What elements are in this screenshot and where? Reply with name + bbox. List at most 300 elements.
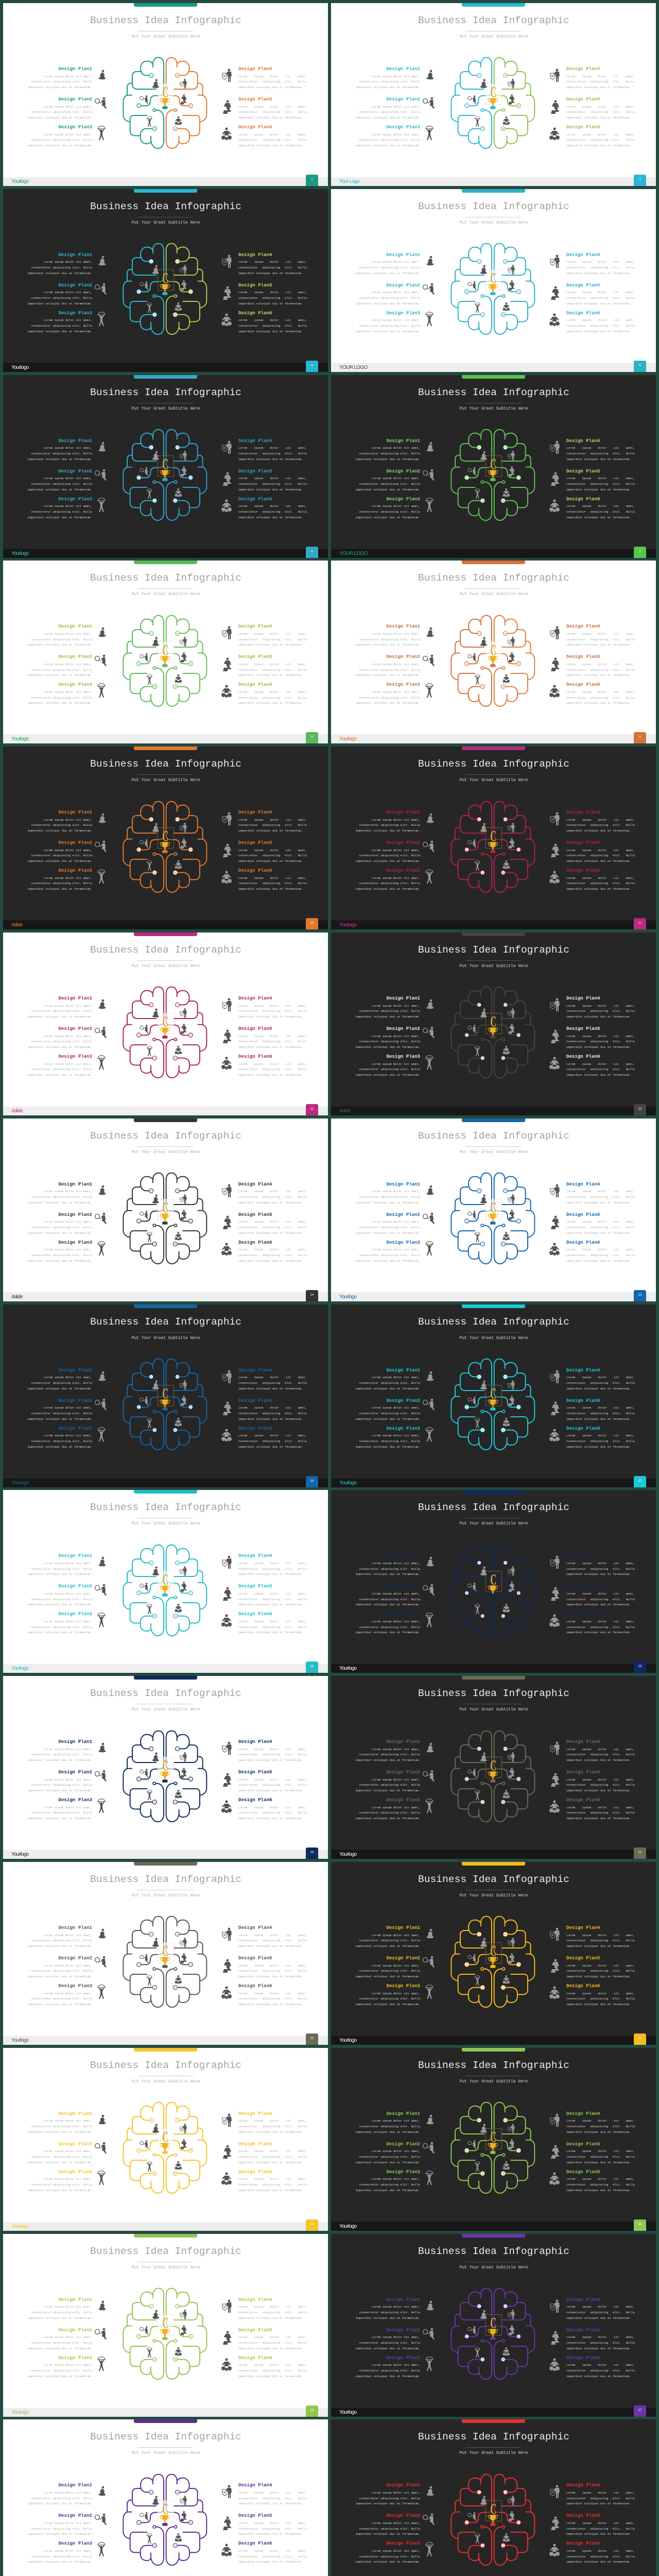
plan 3 icon bbox=[97, 2541, 106, 2557]
plan 6 text: Lorem ipsum dolor sit amet, consectetur adipiscing elit. Nulla imperdiet volutpat dui et fermentum. bbox=[566, 1062, 635, 1077]
brain diagram bbox=[123, 57, 207, 149]
footer with logo and page number bbox=[3, 361, 328, 372]
plan 6 text bbox=[566, 310, 635, 336]
plan 5 text: Lorem ipsum dolor sit amet, consectetur adipiscing elit. Nulla imperdiet volutpat dui et fermentum. bbox=[238, 1406, 307, 1421]
plan 1 icon bbox=[98, 627, 106, 637]
plan 1 text bbox=[24, 2297, 92, 2323]
plan 1 text bbox=[352, 623, 420, 649]
plan 6 icon bbox=[549, 685, 560, 698]
plan 3 icon bbox=[425, 1984, 433, 1999]
plan 3 text bbox=[28, 310, 92, 333]
plan 3 text: Design Plan3 bbox=[59, 1983, 92, 1989]
plan 2 icon bbox=[422, 97, 435, 109]
plan 4 icon bbox=[550, 69, 560, 82]
plan 5 text bbox=[238, 1583, 307, 1609]
plan 6 text bbox=[238, 1240, 307, 1265]
footer with logo and page number bbox=[331, 175, 656, 186]
plan 2 text bbox=[24, 2513, 92, 2538]
plan 4 text: Design Plan4 bbox=[238, 66, 272, 72]
plan 3 text: Design Plan3 bbox=[59, 1426, 92, 1431]
footer with logo and page number: 19 bbox=[638, 1665, 642, 1668]
plan 4 text: Lorem ipsum dolor sit amet, consectetur adipiscing elit. Nulla imperdiet volutpat dui et fermentum. bbox=[238, 2491, 307, 2505]
plan 2 text bbox=[24, 1026, 92, 1052]
plan 3 text bbox=[24, 2169, 92, 2195]
plan 5 text bbox=[238, 1212, 307, 1238]
plan 1 icon bbox=[98, 1928, 106, 1939]
plan 3 text: Design Plan3 bbox=[386, 2355, 420, 2361]
plan 4 icon bbox=[222, 1370, 232, 1383]
plan 6 text bbox=[566, 1983, 635, 2009]
plan 4 text: Design Plan4 bbox=[238, 2111, 272, 2116]
subtitle: Put Your Great Subtitle Here bbox=[460, 964, 528, 969]
plan 5 text bbox=[566, 2513, 635, 2538]
footer with logo and page number: 4slide bbox=[11, 1108, 23, 1114]
plan 5 text bbox=[238, 1769, 307, 1795]
top tab bbox=[462, 3, 525, 7]
title: Business Idea Infographic bbox=[418, 387, 569, 398]
plan 4 text bbox=[566, 1925, 635, 1951]
footer with logo and page number: 25 bbox=[638, 2223, 642, 2226]
plan 1 icon bbox=[98, 1371, 106, 1381]
plan 1 text: Design Plan1 bbox=[386, 66, 420, 72]
plan 1 text: Lorem ipsum dolor sit amet, consectetur adipiscing elit. Nulla imperdiet volutpat dui et fermentum. bbox=[28, 446, 92, 461]
plan 4 icon bbox=[550, 2299, 560, 2313]
plan 4 text: Lorem ipsum dolor sit amet, consectetur adipiscing elit. Nulla imperdiet volutpat dui et fermentum. bbox=[566, 2119, 635, 2134]
title: Business Idea Infographic bbox=[90, 1502, 241, 1513]
plan 5 icon bbox=[223, 100, 231, 114]
plan 1 icon bbox=[98, 999, 106, 1009]
plan 2 icon bbox=[422, 1212, 435, 1224]
plan 2 text: Lorem ipsum dolor sit amet, consectetur adipiscing elit. Nulla imperdiet volutpat dui et fermentum. bbox=[356, 1406, 420, 1421]
plan 5 icon bbox=[551, 1401, 560, 1415]
plan 5 text bbox=[566, 654, 635, 680]
title: Business Idea Infographic bbox=[90, 1688, 241, 1699]
brain diagram bbox=[450, 614, 535, 708]
plan 5 text bbox=[566, 1398, 635, 1423]
plan 6 icon bbox=[221, 313, 232, 326]
plan 2 text: Design Plan2 bbox=[59, 1212, 92, 1217]
plan 1 text: Design Plan1 bbox=[386, 2111, 420, 2116]
plan 3 text bbox=[24, 1426, 92, 1451]
plan 4 icon bbox=[222, 255, 232, 268]
plan 2 text: Design Plan2 bbox=[59, 1583, 92, 1589]
plan 6 text bbox=[238, 1797, 307, 1823]
plan 4 text: Lorem ipsum dolor sit amet, consectetur adipiscing elit. Nulla imperdiet volutpat dui et fermentum. bbox=[238, 632, 307, 647]
plan 6 text bbox=[566, 496, 635, 522]
plan 4 icon bbox=[222, 998, 232, 1011]
plan 4 text: Design Plan4 bbox=[566, 1925, 600, 1930]
plan 6 icon bbox=[549, 313, 560, 326]
plan 4 icon bbox=[550, 812, 560, 825]
footer with logo and page number: 3 bbox=[639, 178, 641, 181]
plan 2 icon bbox=[94, 1956, 107, 1968]
plan 5 text: Lorem ipsum dolor sit amet, consectetur adipiscing elit. Nulla imperdiet volutpat dui et fermentum. bbox=[566, 105, 635, 120]
plan 6 text: Lorem ipsum dolor sit amet, consectetur adipiscing elit. Nulla imperdiet volutpat dui et fermentum. bbox=[566, 1806, 635, 1820]
plan 6 text: Lorem ipsum dolor sit amet, consectetur adipiscing elit. Nulla imperdiet volutpat dui et fermentum. bbox=[566, 2549, 635, 2564]
plan 4 text: Lorem ipsum dolor sit amet, consectetur adipiscing elit. Nulla imperdiet volutpat dui et fermentum. bbox=[238, 1748, 307, 1762]
plan 2 text: Lorem ipsum dolor sit amet, consectetur adipiscing elit. Nulla imperdiet volutpat dui et fermentum. bbox=[28, 1592, 92, 1606]
plan 3 icon bbox=[425, 1054, 433, 1070]
plan 6 text: Design Plan6 bbox=[566, 2540, 600, 2546]
title: Business Idea Infographic bbox=[90, 2246, 241, 2257]
plan 1 text bbox=[24, 1367, 92, 1393]
footer with logo and page number: 4slide bbox=[11, 922, 23, 928]
plan 3 text: Lorem ipsum dolor sit amet, consectetur adipiscing elit. Nulla imperdiet volutpat dui et fermentum. bbox=[356, 1434, 420, 1449]
plan 5 text: Design Plan5 bbox=[238, 2327, 272, 2333]
footer with logo and page number bbox=[3, 1476, 328, 1487]
plan 5 icon bbox=[223, 2516, 232, 2530]
plan 5 text bbox=[566, 840, 635, 866]
plan 4 text: Design Plan4 bbox=[238, 1739, 272, 1744]
plan 2 text bbox=[352, 1769, 420, 1795]
plan 4 text bbox=[238, 252, 307, 275]
plan 1 text: Lorem ipsum dolor sit amet, consectetur adipiscing elit. Nulla imperdiet volutpat dui et fermentum. bbox=[356, 1004, 420, 1019]
plan 4 text: Design Plan4 bbox=[238, 438, 272, 444]
top tab bbox=[134, 1304, 197, 1308]
plan 6 text: Design Plan6 bbox=[238, 1611, 272, 1617]
brain diagram bbox=[450, 2472, 535, 2567]
footer with logo and page number: 8 bbox=[311, 735, 313, 739]
plan 3 text bbox=[356, 124, 420, 147]
title: Business Idea Infographic bbox=[418, 944, 569, 956]
plan 4 text: Lorem ipsum dolor sit amet, consectetur adipiscing elit. Nulla imperdiet volutpat dui et fermentum. bbox=[566, 1004, 635, 1019]
panel: slide 25 lime dark bbox=[331, 2048, 656, 2231]
subtitle: Put Your Great Subtitle Here bbox=[132, 1336, 200, 1341]
plan 1 text bbox=[352, 995, 420, 1021]
plan 3 text: Design Plan3 bbox=[386, 1983, 420, 1989]
plan 1 icon bbox=[426, 999, 434, 1009]
plan 2 icon bbox=[95, 97, 107, 109]
plan 5 text: Lorem ipsum dolor sit amet, consectetur adipiscing elit. Nulla imperdiet volutpat dui et fermentum. bbox=[566, 2521, 635, 2536]
plan 2 text bbox=[24, 1212, 92, 1238]
plan 5 icon bbox=[551, 2331, 560, 2345]
plan 6 text bbox=[566, 868, 635, 893]
plan 6 icon bbox=[549, 1986, 560, 1999]
plan 4 text: Design Plan4 bbox=[238, 1925, 272, 1930]
footer with logo and page number: Yourlogo bbox=[339, 2410, 357, 2415]
plan 4 text: Design Plan4 bbox=[566, 623, 600, 629]
plan 6 icon bbox=[549, 1614, 560, 1627]
subtitle: Put Your Great Subtitle Here bbox=[460, 1707, 528, 1712]
plan 4 text bbox=[238, 2482, 307, 2508]
plan 5 text: Lorem ipsum dolor sit amet, consectetur adipiscing elit. Nulla imperdiet volutpat dui et fermentum. bbox=[566, 1592, 635, 1606]
footer with logo and page number: Yourlogo bbox=[339, 2038, 357, 2043]
plan 2 text: Design Plan2 bbox=[59, 1955, 92, 1961]
plan 5 icon bbox=[551, 1587, 560, 1601]
panel: slide 16 blue dark bbox=[3, 1304, 328, 1487]
top tab bbox=[134, 747, 197, 750]
plan 6 text: Lorem ipsum dolor sit amet, consectetur adipiscing elit. Nulla imperdiet volutpat dui et fermentum. bbox=[566, 1620, 635, 1634]
plan 4 icon bbox=[222, 626, 232, 639]
brain diagram bbox=[122, 614, 207, 708]
plan 6 text: Lorem ipsum dolor sit amet, consectetur adipiscing elit. Nulla imperdiet volutpat dui et fermentum. bbox=[238, 504, 307, 519]
plan 4 text: Lorem ipsum dolor sit amet, consectetur adipiscing elit. Nulla imperdiet volutpat dui et fermentum. bbox=[238, 2305, 307, 2320]
plan 1 icon bbox=[98, 2114, 106, 2125]
plan 5 text: Design Plan5 bbox=[238, 1769, 272, 1775]
panel: slide 23 yellow dark bbox=[331, 1862, 656, 2045]
panel: slide 13 charcoal dark bbox=[331, 933, 656, 1115]
plan 3 text: Design Plan3 bbox=[59, 496, 92, 502]
plan 5 text: Lorem ipsum dolor sit amet, consectetur adipiscing elit. Nulla imperdiet volutpat dui et fermentum. bbox=[238, 1220, 307, 1235]
plan 1 text: Lorem ipsum dolor sit amet, consectetur adipiscing elit. Nulla imperdiet volutpat dui et fermentum. bbox=[28, 1376, 92, 1391]
title: Business Idea Infographic bbox=[90, 758, 241, 770]
brain diagram bbox=[450, 1543, 535, 1637]
subtitle: Put Your Great Subtitle Here bbox=[460, 1150, 528, 1155]
plan 3 text: Design Plan3 bbox=[386, 310, 420, 316]
plan 4 text: Design Plan4 bbox=[566, 66, 600, 72]
plan 5 text: Lorem ipsum dolor sit amet, consectetur adipiscing elit. Nulla imperdiet volutpat dui et fermentum. bbox=[566, 291, 635, 306]
panel: slide 6 blue teal dark bbox=[3, 375, 328, 558]
footer with logo and page number bbox=[3, 918, 328, 929]
panel: slide 20 navy light bbox=[3, 1676, 328, 1859]
plan 5 icon bbox=[551, 100, 559, 114]
panel: slide 12 crimson light bbox=[3, 933, 328, 1115]
plan 3 icon bbox=[425, 126, 433, 140]
plan 5 icon bbox=[223, 1959, 232, 1973]
footer with logo and page number: 9 bbox=[639, 735, 641, 739]
subtitle: Put Your Great Subtitle Here bbox=[132, 1893, 200, 1898]
footer with logo and page number: Yourlogo bbox=[339, 1480, 357, 1486]
title: Business Idea Infographic bbox=[90, 1130, 241, 1142]
plan 2 icon bbox=[94, 2328, 107, 2340]
plan 2 text bbox=[352, 840, 420, 866]
plan 6 icon bbox=[221, 2544, 232, 2556]
title: Business Idea Infographic bbox=[90, 387, 241, 398]
plan 2 icon bbox=[422, 2513, 435, 2525]
plan 3 text bbox=[352, 682, 420, 707]
plan 2 text: Design Plan2 bbox=[386, 840, 420, 845]
footer with logo and page number: 14 bbox=[310, 1293, 314, 1297]
plan 2 text: Design Plan2 bbox=[59, 1769, 92, 1775]
plan 5 icon bbox=[551, 1773, 560, 1787]
plan 5 text: Design Plan5 bbox=[566, 2513, 600, 2518]
brain diagram bbox=[122, 428, 207, 522]
footer with logo and page number: Yourlogo bbox=[11, 1666, 29, 1671]
plan 6 text bbox=[238, 496, 307, 522]
plan 4 text: Design Plan4 bbox=[566, 1553, 600, 1558]
top tab bbox=[134, 3, 197, 7]
plan 5 text: Lorem ipsum dolor sit amet, consectetur adipiscing elit. Nulla imperdiet volutpat dui et fermentum. bbox=[566, 1035, 635, 1049]
footer with logo and page number: 24 bbox=[310, 2223, 314, 2226]
plan 2 text: Design Plan2 bbox=[386, 2141, 420, 2147]
plan 4 icon bbox=[222, 69, 232, 82]
plan 4 text bbox=[238, 1925, 307, 1951]
subtitle: Put Your Great Subtitle Here bbox=[460, 2451, 528, 2455]
plan 3 icon bbox=[97, 682, 106, 698]
plan 3 icon bbox=[425, 1426, 433, 1442]
plan 4 icon bbox=[222, 2113, 232, 2127]
plan 2 text: Lorem ipsum dolor sit amet, consectetur adipiscing elit. Nulla imperdiet volutpat dui et fermentum. bbox=[356, 1035, 420, 1049]
footer with logo and page number: Yourlogo bbox=[339, 2224, 357, 2229]
plan 4 text: Lorem ipsum dolor sit amet, consectetur adipiscing elit. Nulla imperdiet volutpat dui et fermentum. bbox=[238, 1376, 307, 1391]
plan 6 text: Design Plan6 bbox=[238, 2169, 272, 2175]
plan 4 text: Lorem ipsum dolor sit amet, consectetur adipiscing elit. Nulla imperdiet volutpat dui et fermentum. bbox=[238, 75, 307, 89]
plan 4 text bbox=[238, 1181, 307, 1207]
footer with logo and page number: 6 bbox=[311, 550, 313, 553]
plan 3 text: Lorem ipsum dolor sit amet, consectetur adipiscing elit. Nulla imperdiet volutpat dui et fermentum. bbox=[28, 1806, 92, 1820]
plan 3 text: Design Plan3 bbox=[59, 1054, 92, 1059]
plan 1 text: Lorem ipsum dolor sit amet, consectetur adipiscing elit. Nulla imperdiet volutpat dui et fermentum. bbox=[28, 1562, 92, 1576]
panel: slide 19 navy dark bbox=[331, 1490, 656, 1673]
brain diagram bbox=[450, 800, 535, 894]
top tab bbox=[134, 2234, 197, 2238]
plan 6 text bbox=[566, 682, 635, 707]
plan 4 text: Design Plan4 bbox=[566, 1181, 600, 1187]
plan 4 text bbox=[566, 995, 635, 1021]
plan 2 text: Lorem ipsum dolor sit amet, consectetur adipiscing elit. Nulla imperdiet volutpat dui et fermentum. bbox=[356, 2521, 420, 2536]
title: Business Idea Infographic bbox=[418, 15, 569, 26]
plan 1 text: Design Plan1 bbox=[386, 809, 420, 815]
subtitle: Put Your Great Subtitle Here bbox=[460, 2079, 528, 2084]
plan 2 text bbox=[24, 468, 92, 494]
plan 6 icon bbox=[221, 127, 232, 140]
footer with logo and page number: 7 bbox=[639, 550, 641, 553]
plan 3 text: Lorem ipsum dolor sit amet, consectetur adipiscing elit. Nulla imperdiet volutpat dui et fermentum. bbox=[28, 876, 92, 891]
plan 2 icon bbox=[94, 469, 107, 481]
plan 1 text: Lorem ipsum dolor sit amet, consectetur adipiscing elit. Nulla imperdiet volutpat dui et fermentum. bbox=[356, 818, 420, 833]
plan 2 text bbox=[24, 654, 92, 680]
plan 6 text bbox=[238, 1983, 307, 2009]
plan 1 text: Lorem ipsum dolor sit amet, consectetur adipiscing elit. Nulla imperdiet volutpat dui et fermentum. bbox=[28, 1004, 92, 1019]
top tab bbox=[134, 1490, 197, 1494]
plan 2 text bbox=[352, 1398, 420, 1423]
plan 2 icon bbox=[94, 2142, 107, 2154]
plan 3 icon bbox=[97, 497, 106, 513]
plan 5 text bbox=[566, 1026, 635, 1052]
plan 2 text: Design Plan2 bbox=[386, 1212, 420, 1217]
plan 5 icon bbox=[223, 1029, 232, 1043]
title: Business Idea Infographic bbox=[418, 2246, 569, 2257]
plan 2 text: Lorem ipsum dolor sit amet, consectetur adipiscing elit. Nulla imperdiet volutpat dui et fermentum. bbox=[356, 1592, 420, 1606]
plan 3 text bbox=[352, 1797, 420, 1823]
panel: slide 24 yellow light bbox=[3, 2048, 328, 2231]
plan 6 text bbox=[238, 1054, 307, 1079]
plan 3 icon bbox=[425, 497, 433, 513]
plan 5 text bbox=[566, 1769, 635, 1795]
plan 2 icon bbox=[422, 2328, 435, 2340]
plan 2 text: Design Plan2 bbox=[386, 468, 420, 474]
plan 1 text bbox=[352, 1925, 420, 1951]
plan 5 text: Lorem ipsum dolor sit amet, consectetur adipiscing elit. Nulla imperdiet volutpat dui et fermentum. bbox=[238, 105, 307, 120]
plan 2 text: Design Plan2 bbox=[59, 282, 92, 288]
plan 5 icon bbox=[551, 1959, 560, 1973]
plan 6 text: Design Plan6 bbox=[566, 1983, 600, 1989]
footer with logo and page number: 18 bbox=[310, 1665, 314, 1668]
plan 4 text: Lorem ipsum dolor sit amet, consectetur adipiscing elit. Nulla imperdiet volutpat dui et fermentum. bbox=[566, 632, 635, 647]
plan 5 icon bbox=[223, 843, 232, 857]
plan 4 text: Lorem ipsum dolor sit amet, consectetur adipiscing elit. Nulla imperdiet volutpat dui et fermentum. bbox=[238, 1562, 307, 1576]
plan 5 icon bbox=[223, 472, 232, 486]
plan 1 text: Lorem ipsum dolor sit amet, consectetur adipiscing elit. Nulla imperdiet volutpat dui et fermentum. bbox=[28, 632, 92, 647]
plan 6 icon bbox=[221, 1986, 232, 1999]
panel: slide 28 purple light bbox=[3, 2419, 328, 2576]
brain diagram bbox=[450, 2100, 535, 2195]
plan 3 text bbox=[352, 310, 420, 336]
plan 6 text: Lorem ipsum dolor sit amet, consectetur adipiscing elit. Nulla imperdiet volutpat dui et fermentum. bbox=[238, 2363, 307, 2378]
plan 5 text: Design Plan5 bbox=[566, 1583, 600, 1589]
plan 2 text bbox=[352, 654, 420, 680]
plan 2 text: Lorem ipsum dolor sit amet, consectetur adipiscing elit. Nulla imperdiet volutpat dui et fermentum. bbox=[356, 105, 420, 120]
plan 1 text: Lorem ipsum dolor sit amet, consectetur adipiscing elit. Nulla imperdiet volutpat dui et fermentum. bbox=[356, 632, 420, 647]
plan 5 text: Design Plan5 bbox=[566, 654, 600, 659]
plan 1 text bbox=[352, 2111, 420, 2137]
plan 5 text bbox=[238, 840, 307, 866]
footer with logo and page number bbox=[331, 1104, 656, 1115]
plan 5 text bbox=[566, 2141, 635, 2167]
plan 1 text: Lorem ipsum dolor sit amet, consectetur adipiscing elit. Nulla imperdiet volutpat dui et fermentum. bbox=[356, 2119, 420, 2134]
top tab bbox=[134, 1118, 197, 1122]
plan 2 text: Lorem ipsum dolor sit amet, consectetur adipiscing elit. Nulla imperdiet volutpat dui et fermentum. bbox=[356, 2149, 420, 2164]
brain diagram bbox=[122, 1543, 207, 1637]
plan 6 text: Design Plan6 bbox=[238, 310, 272, 316]
plan 2 text bbox=[24, 1955, 92, 1981]
plan 6 text: Lorem ipsum dolor sit amet, consectetur adipiscing elit. Nulla imperdiet volutpat dui et fermentum. bbox=[566, 876, 635, 891]
plan 3 icon bbox=[97, 1426, 106, 1442]
plan 5 text: Lorem ipsum dolor sit amet, consectetur adipiscing elit. Nulla imperdiet volutpat dui et fermentum. bbox=[238, 1035, 307, 1049]
footer with logo and page number bbox=[331, 1476, 656, 1487]
plan 4 icon bbox=[222, 2299, 232, 2313]
plan 2 icon bbox=[422, 1026, 435, 1038]
title: Business Idea Infographic bbox=[90, 15, 241, 26]
plan 3 text: Design Plan3 bbox=[386, 1426, 420, 1431]
plan 1 icon bbox=[426, 2486, 434, 2496]
plan 1 icon bbox=[426, 1928, 434, 1939]
top tab bbox=[462, 747, 525, 750]
brain diagram bbox=[122, 1171, 207, 1265]
title: Business Idea Infographic bbox=[418, 1316, 569, 1328]
top tab bbox=[462, 561, 525, 564]
plan 6 icon bbox=[221, 2172, 232, 2185]
plan 3 icon bbox=[425, 2170, 433, 2185]
panel: slide 5 teal blue light bbox=[331, 189, 656, 372]
plan 1 text: Lorem ipsum dolor sit amet, consectetur adipiscing elit. Nulla imperdiet volutpat dui et fermentum. bbox=[28, 2305, 92, 2320]
plan 4 text bbox=[238, 623, 307, 649]
plan 4 text bbox=[238, 66, 307, 89]
plan 1 icon bbox=[426, 627, 434, 637]
plan 5 text: Design Plan5 bbox=[238, 2141, 272, 2147]
plan 6 text: Design Plan6 bbox=[566, 124, 600, 130]
plan 4 text bbox=[238, 2111, 307, 2137]
plan 6 text: Lorem ipsum dolor sit amet, consectetur adipiscing elit. Nulla imperdiet volutpat dui et fermentum. bbox=[566, 318, 635, 333]
plan 1 text: Design Plan1 bbox=[386, 623, 420, 629]
plan 6 text: Design Plan6 bbox=[238, 1240, 272, 1245]
plan 6 text bbox=[238, 2169, 307, 2195]
plan 2 icon bbox=[94, 1770, 107, 1782]
plan 1 text: Design Plan1 bbox=[386, 1553, 420, 1558]
plan 5 text bbox=[238, 468, 307, 494]
top tab bbox=[462, 1118, 525, 1122]
panel: slide 26 lime light bbox=[3, 2234, 328, 2417]
footer with logo and page number: Yourlogo bbox=[11, 179, 29, 184]
plan 1 text: Design Plan1 bbox=[386, 2482, 420, 2488]
top tab bbox=[134, 1862, 197, 1866]
footer with logo and page number bbox=[331, 1848, 656, 1859]
plan 1 text bbox=[24, 623, 92, 649]
plan 5 text: Lorem ipsum dolor sit amet, consectetur adipiscing elit. Nulla imperdiet volutpat dui et fermentum. bbox=[238, 1964, 307, 1978]
panel: slide 10 orange dark bbox=[3, 747, 328, 929]
plan 4 text: Design Plan4 bbox=[238, 1181, 272, 1187]
plan 1 text bbox=[352, 2482, 420, 2508]
plan 2 text bbox=[28, 96, 92, 120]
brain diagram bbox=[122, 1914, 207, 2009]
plan 1 text bbox=[24, 1181, 92, 1207]
plan 3 text: Lorem ipsum dolor sit amet, consectetur adipiscing elit. Nulla imperdiet volutpat dui et fermentum. bbox=[28, 1620, 92, 1634]
plan 2 text bbox=[24, 1583, 92, 1609]
plan 4 text: Lorem ipsum dolor sit amet, consectetur adipiscing elit. Nulla imperdiet volutpat dui et fermentum. bbox=[238, 2119, 307, 2134]
plan 6 icon bbox=[221, 499, 232, 512]
plan 2 text bbox=[24, 840, 92, 866]
plan 3 text: Lorem ipsum dolor sit amet, consectetur adipiscing elit. Nulla imperdiet volutpat dui et fermentum. bbox=[356, 2549, 420, 2564]
